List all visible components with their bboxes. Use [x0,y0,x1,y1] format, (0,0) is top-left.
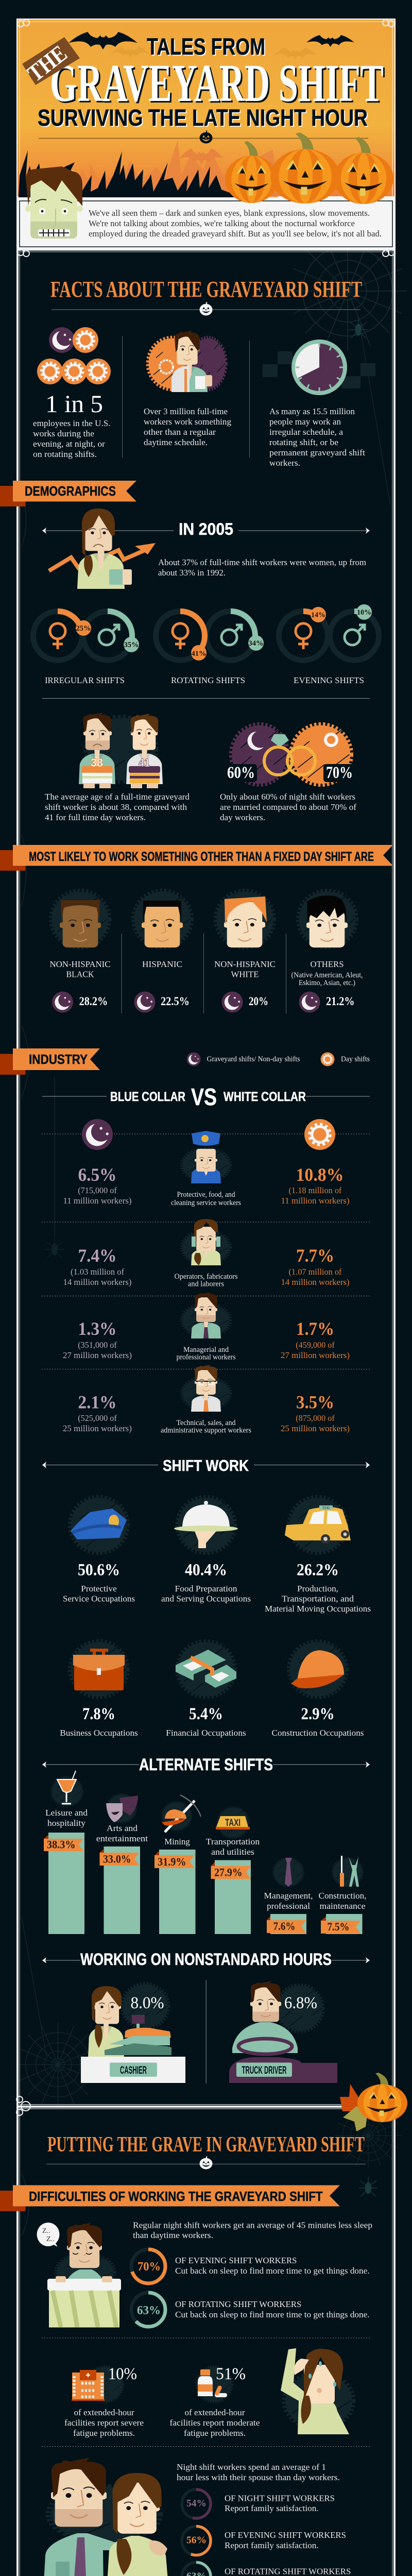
faces: ethnicity [51,891,356,947]
stats: shift work row one: 50.6% [78,1561,120,1580]
row: technical, sales and administrative [63,1365,350,1434]
text: less time with spouse [177,2462,340,2482]
text: less time with spouse: hour less with their spouse than day workers. [177,2472,340,2482]
row: managerial and professional: 27 million workers) [63,1350,132,1360]
icon: taxi: TAXI [322,1506,330,1510]
chart: 70 percent sleep donut: 70% [138,2260,161,2274]
heading: blue collar vs white collar: BLUE COLLAR [110,1090,185,1104]
text: average age: The average age of a full-time graveyard [45,792,190,802]
row: protective, food and cleaning: (715,000 of [78,1185,117,1195]
icon: big sun [304,1119,335,1150]
bar labels: Transportation [206,1837,260,1846]
stat: 10 percent fatigue [64,2365,144,2438]
illustration: men with birthday cakes: 41 [139,756,150,769]
fact text: 3 million: daytime schedule. [144,437,208,447]
icon: miner helmet and pickaxe [162,1795,201,1832]
fact text: 3 million: workers work something [144,417,232,427]
ribbon: demographics: DEMOGRAPHICS [25,483,116,499]
row: technical, sales and administrative: 25 million workers) [281,1423,350,1433]
bar labels: entertainment [96,1834,148,1843]
heading divider [46,2156,366,2169]
icon: taxi sign [216,1807,250,1838]
text: family satisfaction: OF NIGHT SHIFT WORKERS [225,2494,335,2503]
chart: evening shifts [279,611,379,660]
heading divider [52,302,360,315]
icon: food cloche [174,1497,238,1553]
chart: 70 percent sleep donut [131,2249,165,2283]
text: family satisfaction [225,2494,351,2576]
stat: 8.0 percent: 8.0% [131,1994,164,2012]
stat: 10 percent fatigue: fatigue problems. [73,2428,135,2438]
pumpkins in header [225,132,393,204]
row: technical, sales and administrative: (525,000 of [78,1413,117,1423]
fact text: 3 million [144,406,232,447]
panel: putting the grave [46,2133,366,2169]
illustration: day and night worker [148,330,226,392]
stat: 51 percent fatigue [170,2365,260,2438]
stat: 10 percent fatigue: of extended-hour [74,2408,134,2417]
charts: family satisfaction donuts: 54% [186,2498,207,2509]
icon: big moon [82,1119,113,1150]
stat: 1 in 5: on rotating shifts. [33,449,97,459]
stats: ethnicity percentages: 28.2% [79,995,108,1008]
chart labels: IRREGULAR SHIFTS [45,675,125,685]
stat: 10 percent fatigue: 10% [108,2365,137,2383]
illustration: cashier [81,1984,185,2083]
cashier label: CASHIER [120,2064,147,2076]
icon: briefcase [70,1641,128,1697]
stat: 51 percent fatigue: 51% [216,2365,246,2383]
stat: 10 percent fatigue: facilities report severe [64,2418,144,2428]
stats: shift work row one: 26.2% [297,1561,339,1580]
speech bubble [37,2223,60,2247]
text: evening workers sleep: OF EVENING SHIFT WORKERS [175,2256,297,2265]
percentage bubbles: 41% [192,650,206,658]
text: ethnicity labels: OTHERS [310,959,344,969]
truck driver label [236,2063,292,2077]
value ribbons: 27.9% [214,1866,243,1879]
text: ethnicity labels [49,959,363,987]
text: marriage [220,792,356,822]
icon: taxi [285,1497,351,1553]
stats: shift work row one: Protective [81,1584,117,1594]
gender symbols [50,623,365,649]
stats: shift work row two: 7.8% [82,1705,115,1723]
bar labels: Leisure and [45,1808,88,1818]
text: marriage: are married compared to about 70% of [220,802,356,812]
stat: 51 percent fatigue: of extended-hour [184,2408,245,2417]
text: regular sleep: Regular night shift workers get an average of 45 minutes less sleep [133,2221,372,2230]
row: protective, food and cleaning: 10.8% [296,1164,344,1185]
text: regular sleep: than daytime workers. [133,2230,213,2240]
text: family satisfaction: OF EVENING SHIFT WORKERS [225,2530,346,2540]
row: protective, food and cleaning: 11 million workers) [63,1196,132,1206]
row: protective, food and cleaning: (1.18 million of [288,1185,342,1195]
stat: 1 in 5: employees in the U.S. [33,418,110,428]
stats: shift work row two: 2.9% [301,1705,335,1723]
bar labels: Mining [164,1837,190,1846]
bar labels: hospitality [47,1818,86,1828]
row: operators, fabricators and laborers: 14 million workers) [281,1277,349,1287]
row: operators, fabricators and laborers: and laborers [188,1280,224,1288]
stats: ethnicity percentages: 20% [249,995,268,1008]
fact text: 3 million: Over 3 million full-time [144,406,228,416]
text: ethnicity labels: BLACK [66,970,94,979]
icon: right bat [306,35,354,47]
heading: alternate shifts: ALTERNATE SHIFTS [139,1755,273,1774]
row: managerial and professional [63,1292,350,1361]
panel: intro [16,197,396,250]
illustration: manager [182,1292,230,1338]
row: technical, sales and administrative: administrative support workers [161,1426,251,1434]
row: protective, food and cleaning [63,1131,349,1207]
ribbon: demographics [0,481,136,506]
stat: 1 in 5: 1 in 5 [45,391,103,418]
panel: header [16,19,396,198]
percentage bubbles: 25% [76,624,91,633]
text: ethnicity labels: Eskimo, Asian, etc.) [299,979,355,987]
text: family satisfaction: Report family satisfaction. [225,2540,319,2550]
intro text: We're not talking about zombies, we're talking about the nocturnal workforce [89,218,355,228]
chart labels: EVENING SHIFTS [294,675,364,685]
speech bubble: Z.. [46,2235,55,2243]
stats: shift work row one: 40.4% [185,1561,227,1580]
heading: blue collar vs white collar: VS [191,1083,217,1110]
charts: family satisfaction donuts [182,2489,211,2576]
stats: shift work row two [60,1705,364,1738]
row: managerial and professional: professional workers [176,1353,236,1361]
text: rotating workers sleep [175,2299,370,2319]
text: average age [45,792,190,822]
icon: left bat [68,32,138,49]
text: ethnicity labels: (Native American, Aleut, [291,971,363,979]
text: ethnicity labels: NON-HISPANIC [49,959,110,969]
row: operators, fabricators and laborers: (1.07 million of [288,1267,342,1277]
stats: shift work row one: Production, [297,1584,338,1594]
illustration: clock [263,342,375,393]
fact text: 15.5 million [269,406,365,468]
text: evening workers sleep: Cut back on sleep to find more time to get things done. [175,2266,370,2276]
chart: rotating shifts [156,611,255,660]
row: technical, sales and administrative: 25 million workers) [63,1423,132,1433]
text: less time with spouse: Night shift workers spend an average of 1 [177,2462,326,2472]
value ribbons [44,1835,360,1934]
illustration: men with birthday cakes [79,713,163,788]
row: managerial and professional: (351,000 of [78,1340,117,1350]
charts: family satisfaction donuts: 56% [186,2535,207,2546]
cashier label [110,2063,157,2077]
percentage bubbles: 34% [248,639,264,648]
section: in 2005 [42,509,370,589]
illustration: headset operator [182,1219,230,1265]
value ribbons: 33.0% [103,1853,131,1865]
row: operators, fabricators and laborers: 7.7% [296,1245,334,1266]
title: tales from: TALES FROM [148,35,266,61]
heading: blue collar vs white collar: WHITE COLLAR [224,1090,306,1104]
percentage bubbles [76,604,372,660]
icon: money [176,1641,236,1697]
heading: alternate shifts [42,1755,370,1774]
chart labels: ROTATING SHIFTS [171,675,245,685]
text: ethnicity labels: NON-HISPANIC [214,959,276,969]
grass silhouette [19,150,242,197]
text: 6.5% [78,1164,116,1185]
legend: Day shifts [341,1055,370,1063]
ribbon: industry: INDUSTRY [29,1052,88,1067]
text: ethnicity labels: HISPANIC [142,959,182,969]
icon: theatre masks [106,1794,138,1822]
stat: 70 percent: 70% [326,764,353,782]
chart: 63 percent sleep donut: 63% [137,2304,161,2317]
row: managerial and professional: 27 million workers) [281,1350,350,1360]
title: wooden sign the: THE [22,40,72,87]
row: operators, fabricators and laborers [63,1219,349,1288]
fact text: 15.5 million: As many as 15.5 million [269,406,355,416]
text: average age: shift worker is about 38, compared with [45,802,187,812]
fact text: 15.5 million: permanent graveyard shift [269,448,365,457]
stat: 1 in 5 [33,391,110,459]
text: women share [158,557,366,578]
fact text: 15.5 million: workers. [269,458,300,468]
text: marriage: Only about 60% of night shift workers [220,792,355,802]
illustration: police officer [182,1131,230,1183]
stats: shift work row one: Food Preparation [175,1584,237,1594]
text: rotating workers sleep: Cut back on sleep to find more time to get things done. [175,2310,370,2319]
fact text: 3 million: other than a regular [144,427,216,437]
stats: shift work row one: and Serving Occupations [161,1594,251,1604]
heading with arrows [42,520,370,538]
text: regular sleep [133,2221,372,2240]
stat: 60 percent: 60% [227,764,255,782]
decoration: pumpkin and leaves [340,2073,407,2131]
stats: shift work row one [63,1561,371,1614]
icon: hard hat [289,1641,347,1697]
text: average age: 41 for full time day workers. [45,812,146,822]
truck driver label: TRUCK DRIVER [242,2064,286,2076]
icon: pill bottle [198,2369,227,2397]
icon group: 1 in 5 [37,327,111,384]
bar labels: professional [267,1901,310,1911]
bars [48,1833,363,1934]
row: protective, food and cleaning: cleaning service workers [171,1199,241,1207]
bar labels: Management, [264,1891,313,1901]
icon: cocktail [52,1771,82,1806]
row: managerial and professional: Managerial and [183,1346,229,1354]
stats: ethnicity percentages: 21.2% [326,995,355,1008]
icon: police cap [70,1497,128,1553]
illustration: sleeping man [37,2223,121,2328]
speech bubble: Z.. [42,2227,50,2235]
stats: shift work row two: Business Occupations [60,1728,138,1738]
fact text: 15.5 million: irregular schedule, a [269,427,343,437]
text: women share: about 33% in 1992. [158,568,226,578]
row: technical, sales and administrative: 3.5% [296,1392,334,1413]
illustration: couple [43,2458,169,2576]
bar labels: Construction, [318,1891,367,1901]
bar labels [45,1808,367,1911]
row: operators, fabricators and laborers: (1.03 million of [71,1267,124,1277]
icon: hospital [72,2370,105,2401]
stat: 51 percent fatigue: facilities report moderate [170,2418,260,2428]
icon: taxi sign: TAXI [225,1818,241,1828]
ribbon: difficulties: DIFFICULTIES OF WORKING THE GRAVEYARD SHIFT [29,2189,323,2204]
ribbon: most likely [0,845,393,871]
illustration: truck driver [229,1981,337,2083]
stats: shift work row two: Financial Occupations [166,1728,246,1738]
row: technical, sales and administrative: 2.1% [78,1392,116,1413]
text: family satisfaction: Report family satisfaction. [225,2503,319,2513]
stat: 1 in 5: evening, at night, or [33,439,105,449]
stat: 1 in 5: works during the [33,429,94,438]
bar labels: Arts and [107,1823,138,1833]
bar labels: and utilities [211,1847,254,1857]
percentage bubbles: 14% [311,611,325,619]
value ribbons: 7.6% [273,1920,296,1933]
ribbon: industry [0,1048,100,1075]
illustration: sweating woman [281,2348,353,2434]
percentage bubbles: 10% [357,608,371,617]
heading: nonstandard hours: WORKING ON NONSTANDARD HOURS [80,1950,332,1969]
divider with pumpkin icon [39,130,368,143]
zombie illustration [25,166,83,239]
icon: tools [333,1856,363,1887]
chart: 63 percent sleep donut [131,2293,165,2327]
row: protective, food and cleaning: Protective, food, and [177,1191,235,1199]
title: tales from: TALES FROM [147,33,265,60]
heading with arrows: IN 2005 [179,520,233,538]
legend: Graveyard shifts/ Non-day shifts [207,1055,300,1063]
heading: shift work [42,1456,370,1475]
text: rotating workers sleep: OF ROTATING SHIFT WORKERS [175,2299,301,2309]
row: managerial and professional: 1.3% [78,1318,116,1339]
bar labels: maintenance [319,1901,366,1911]
fact text: 15.5 million: people may work an [269,417,341,427]
row: managerial and professional: 1.7% [296,1318,334,1339]
text: marriage: day workers. [220,812,265,822]
stats: shift work row one: Transportation, and [282,1594,354,1604]
row: technical, sales and administrative: (875,000 of [296,1413,335,1423]
illustration: marriage rings [226,724,354,785]
row: managerial and professional: (459,000 of [296,1340,335,1350]
heading: blue collar vs white collar [42,1083,370,1110]
row: operators, fabricators and laborers: Operators, fabricators [174,1273,238,1281]
illustration: woman and rising arrow [49,509,156,589]
text: women share: About 37% of full-time shift workers were women, up from [158,557,366,567]
row: operators, fabricators and laborers: 7.4% [78,1245,116,1266]
legend [186,1052,370,1066]
percentage bubbles: 35% [124,641,139,649]
value ribbons: 7.5% [328,1920,349,1933]
panel: facts [33,277,375,468]
stats: shift work row two: Construction Occupations [272,1728,364,1738]
faint bats [111,46,317,165]
stats: shift work row one: Material Moving Occupations [265,1604,371,1614]
stats: shift work row one: Service Occupations [63,1594,135,1604]
icon: necktie [273,1858,303,1887]
stats: ethnicity percentages [52,991,355,1013]
text: ethnicity labels: WHITE [231,970,259,979]
ribbon: difficulties [0,2185,340,2211]
stat: 51 percent fatigue: fatigue problems. [184,2428,246,2438]
text: evening workers sleep [175,2256,370,2276]
row: technical, sales and administrative: Technical, sales, and [176,1419,236,1427]
chart: irregular shifts [33,611,132,660]
illustration: men with birthday cakes: 38 [91,756,103,769]
row: operators, fabricators and laborers: 14 million workers) [63,1277,132,1287]
fact text: 15.5 million: rotating shift, or be [269,437,338,447]
row: protective, food and cleaning: 11 million workers) [281,1196,349,1206]
intro text: employed during the dreaded graveyard shift. But as you'll see below, it's not all bad. [89,229,382,239]
chart labels [45,675,364,685]
value ribbons: 31.9% [158,1855,186,1868]
text: family satisfaction: OF ROTATING SHIFT WORKERS [225,2567,351,2576]
stats: shift work row two: 5.4% [189,1705,223,1723]
heading: shift work: SHIFT WORK [163,1456,249,1475]
stats: ethnicity percentages: 22.5% [161,995,190,1008]
intro text [89,208,382,239]
value ribbons: 38.3% [47,1838,76,1851]
stat: 6.8 percent: 6.8% [284,1994,317,2012]
intro text: We've all seen them – dark and sunken eyes, blank expressions, slow movements. [89,208,370,218]
illustration: office worker with glasses [182,1365,230,1412]
bar chart: alternate shifts [44,1771,367,1934]
faint background grass [72,140,278,197]
